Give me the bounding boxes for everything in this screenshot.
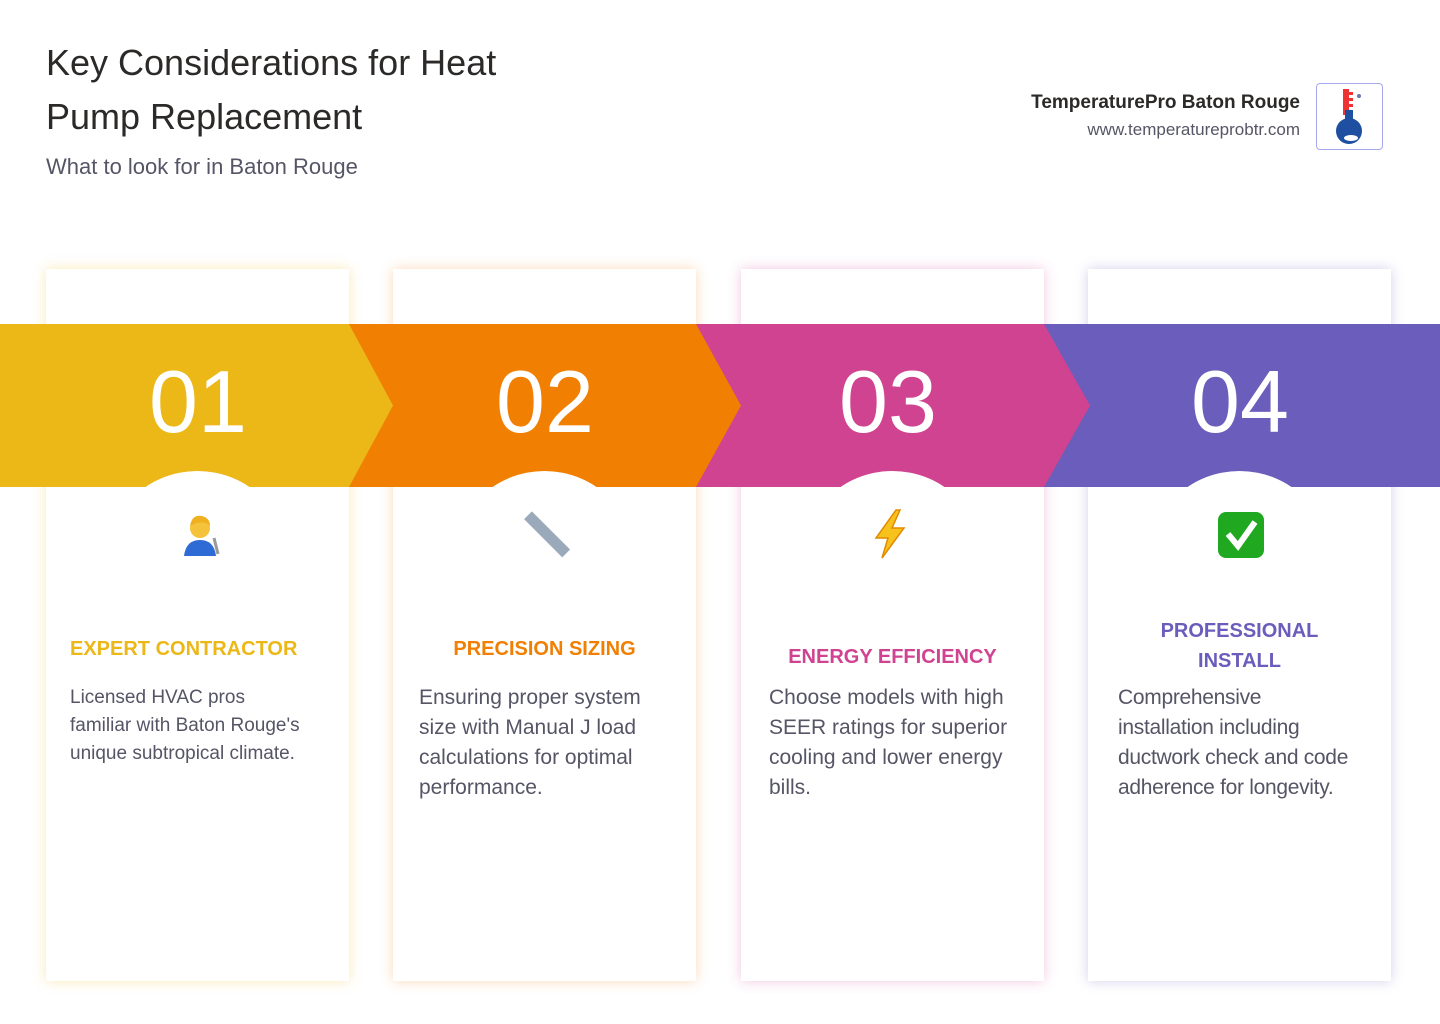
card 2 text	[419, 638, 641, 799]
card 1	[46, 269, 349, 981]
logo	[1316, 83, 1383, 150]
number 02: 02	[496, 352, 594, 451]
body	[70, 687, 300, 764]
body: Choose models with high	[769, 686, 1004, 709]
number 03: 03	[839, 352, 937, 451]
body: performance.	[419, 776, 543, 799]
body: bills.	[769, 776, 811, 799]
card 3	[741, 269, 1044, 981]
card 1 text	[70, 638, 300, 764]
body: ductwork check and code	[1118, 746, 1348, 769]
card 3 text	[769, 646, 1007, 799]
body: familiar with Baton Rouge's	[70, 715, 300, 736]
body: SEER ratings for superior	[769, 716, 1007, 739]
number 01: 01	[149, 352, 247, 451]
brand url: www.temperatureprobtr.com	[1087, 120, 1300, 139]
icon: mechanic	[184, 516, 220, 556]
icon: ruler	[524, 512, 570, 558]
title: Key Considerations for Heat Pump Replacement	[46, 42, 496, 137]
card 2	[393, 269, 696, 981]
card 4	[1088, 269, 1391, 981]
body: size with Manual J load	[419, 716, 636, 739]
icon: lightning	[874, 509, 906, 558]
body	[769, 686, 1007, 799]
circles	[105, 471, 290, 656]
chevron band	[0, 324, 1440, 487]
body: Ensuring proper system	[419, 686, 641, 709]
brand block	[1031, 83, 1383, 150]
body: Licensed HVAC pros	[70, 687, 245, 708]
body: calculations for optimal	[419, 746, 633, 769]
subtitle: What to look for in Baton Rouge	[46, 154, 358, 179]
body: cooling and lower energy	[769, 746, 1002, 769]
body: installation including	[1118, 716, 1299, 739]
body: unique subtropical climate.	[70, 743, 295, 764]
body: adherence for longevity.	[1118, 776, 1333, 799]
icon: check	[1218, 512, 1264, 558]
heading: PRECISION SIZING	[453, 638, 636, 660]
heading: EXPERT CONTRACTOR	[70, 638, 297, 660]
heading: ENERGY EFFICIENCY	[788, 646, 997, 668]
body	[419, 686, 641, 799]
body: Comprehensive	[1118, 686, 1261, 709]
card 4 text	[1118, 620, 1348, 799]
brand name: TemperaturePro Baton Rouge	[1031, 92, 1300, 113]
body	[1118, 686, 1348, 799]
number 04: 04	[1191, 352, 1289, 451]
heading: PROFESSIONAL INSTALL	[1161, 620, 1318, 672]
